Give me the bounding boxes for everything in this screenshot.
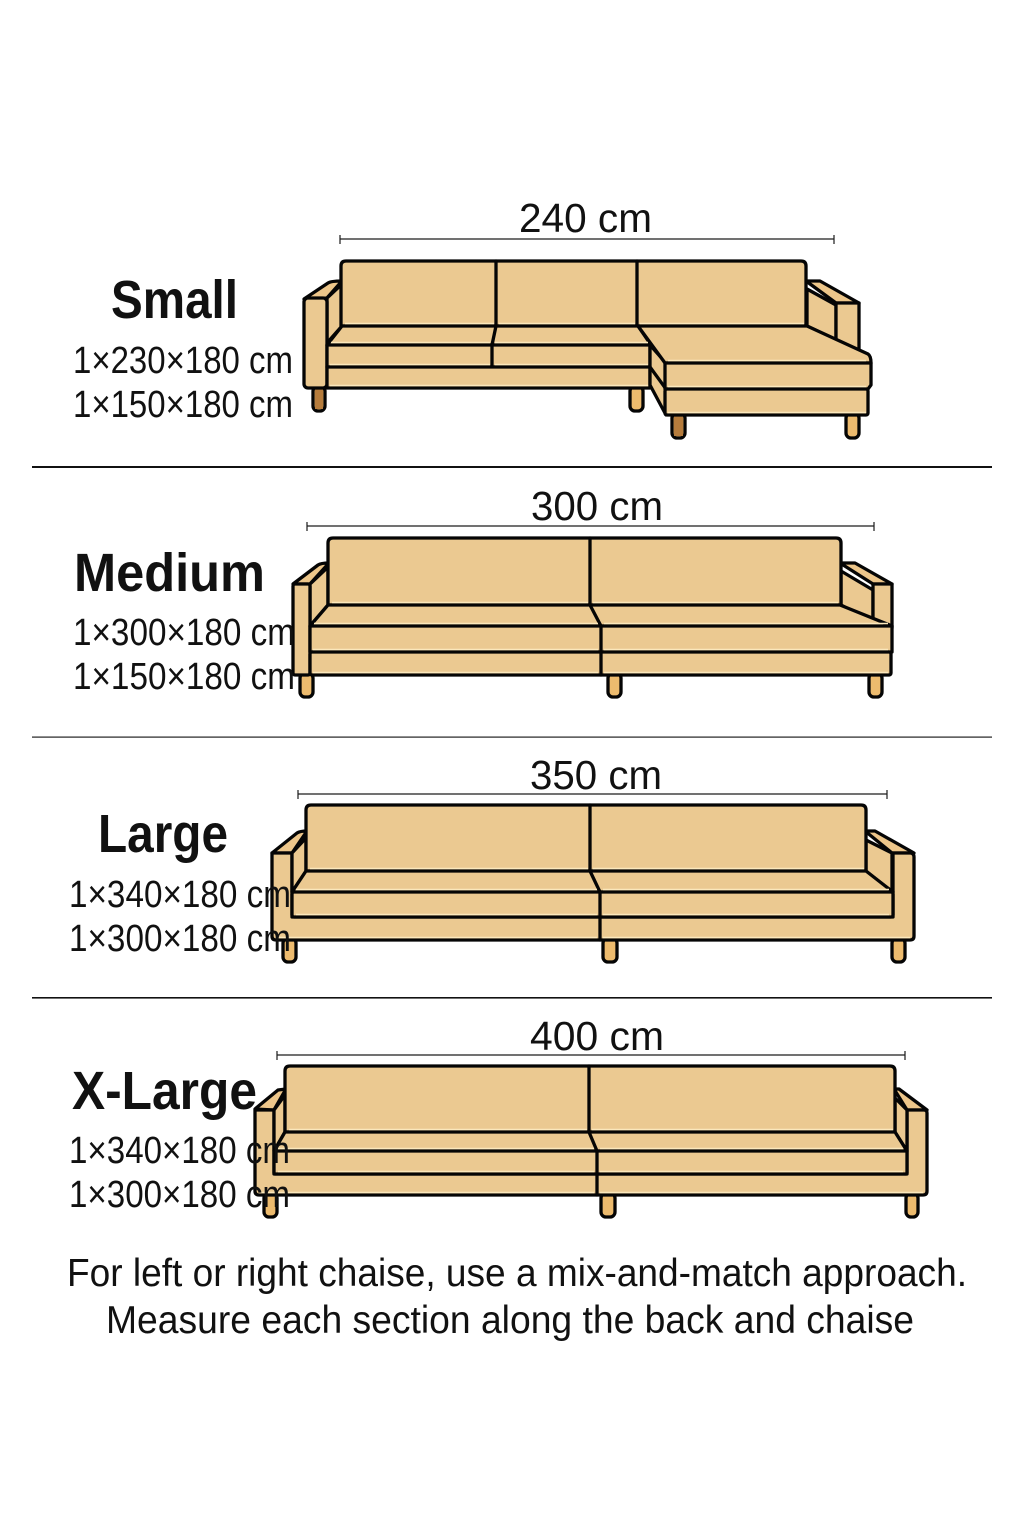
text: medium dimensions 1: 1×300×180 cm [73, 612, 295, 654]
dimension line: 350 cm [298, 790, 887, 799]
text: small dimensions 2: 1×150×180 cm [73, 384, 293, 426]
dimension line: 300 cm [307, 522, 874, 531]
label: 300 cm: 300 cm [531, 483, 663, 529]
dimension line: 240 cm [340, 235, 834, 244]
heading: Medium: Medium [74, 543, 265, 603]
footnote text: Measure each section along the back and chaise [106, 1299, 914, 1342]
label: 240 cm: 240 cm [519, 195, 652, 241]
heading: Small: Small [111, 270, 238, 330]
heading: X-Large: X-Large [72, 1061, 257, 1121]
text: medium dimensions 2: 1×150×180 cm [73, 656, 295, 698]
icon: small sectional sofa [304, 261, 871, 438]
text: large dimensions 2: 1×300×180 cm [69, 918, 291, 960]
panel: small sofa [304, 235, 871, 438]
panel: large sofa [272, 790, 914, 962]
footnote text: For left or right chaise, use a mix-and-match approach. [67, 1252, 967, 1295]
text: large dimensions 1: 1×340×180 cm [69, 874, 291, 916]
text: x-large dimensions 2: 1×300×180 cm [69, 1174, 290, 1216]
label: 350 cm: 350 cm [530, 752, 662, 798]
heading: Large: Large [98, 804, 228, 864]
text: x-large dimensions 1: 1×340×180 cm [69, 1130, 290, 1172]
footnote text [67, 1252, 967, 1342]
label: 400 cm: 400 cm [530, 1013, 664, 1059]
panel: medium sofa [293, 522, 892, 697]
dimension line: 400 cm [277, 1051, 905, 1060]
panel: x-large sofa [255, 1051, 927, 1217]
icon: medium sofa [293, 538, 892, 697]
text: small dimensions 1: 1×230×180 cm [73, 340, 293, 382]
icon: large sofa [272, 805, 914, 962]
icon: x-large sofa [255, 1066, 927, 1217]
